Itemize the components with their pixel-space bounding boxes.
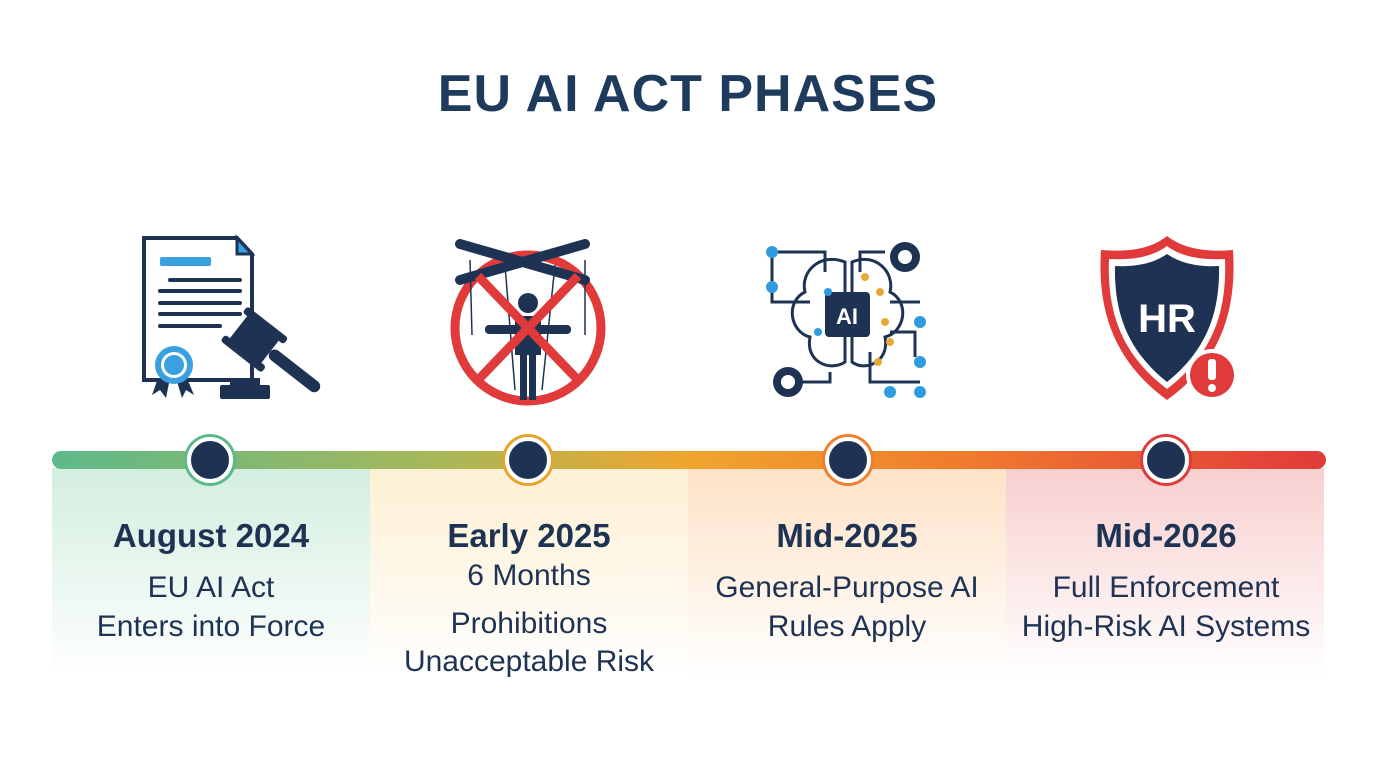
text: early 2025: Prohibitions [451,607,607,640]
node 3 [825,437,871,483]
text: mid 2025: General-Purpose AI [715,571,979,604]
panel: mid 2026 [1006,468,1324,678]
text: mid 2025: Mid-2025 [776,517,918,554]
timeline bar [52,451,1326,469]
text: august 2024: EU AI Act [148,571,274,604]
node 4 [1143,437,1189,483]
node 1 [187,437,233,483]
panel: early 2025 [370,468,688,678]
text: mid 2026: High-Risk AI Systems [1022,610,1310,643]
text: early 2025: Early 2025 [447,517,611,554]
text: mid 2026 [1022,517,1310,643]
title: EU AI ACT PHASES [438,65,938,123]
text: august 2024: Enters into Force [97,610,325,643]
icon: prohibited puppet [450,239,606,406]
text: mid 2025: Rules Apply [768,610,926,643]
icon: document with gavel [142,234,320,399]
text: august 2024 [97,517,325,643]
text: early 2025 [404,517,654,678]
text: mid 2026: Full Enforcement [1053,571,1279,604]
icon: AI brain circuit [766,242,926,398]
text: mid 2025 [715,517,979,643]
text: mid 2026: Mid-2026 [1095,517,1237,554]
node 2 [505,437,551,483]
icon: AI brain circuit: AI [836,304,858,329]
icon: HR shield with warning: HR [1138,297,1196,341]
panel: august 2024 [52,468,370,678]
text: august 2024: August 2024 [113,517,309,554]
panel: mid 2025 [688,468,1006,678]
icon: HR shield with warning [1100,236,1234,400]
text: early 2025: Unacceptable Risk [404,645,654,678]
text: early 2025: 6 Months [467,559,591,592]
